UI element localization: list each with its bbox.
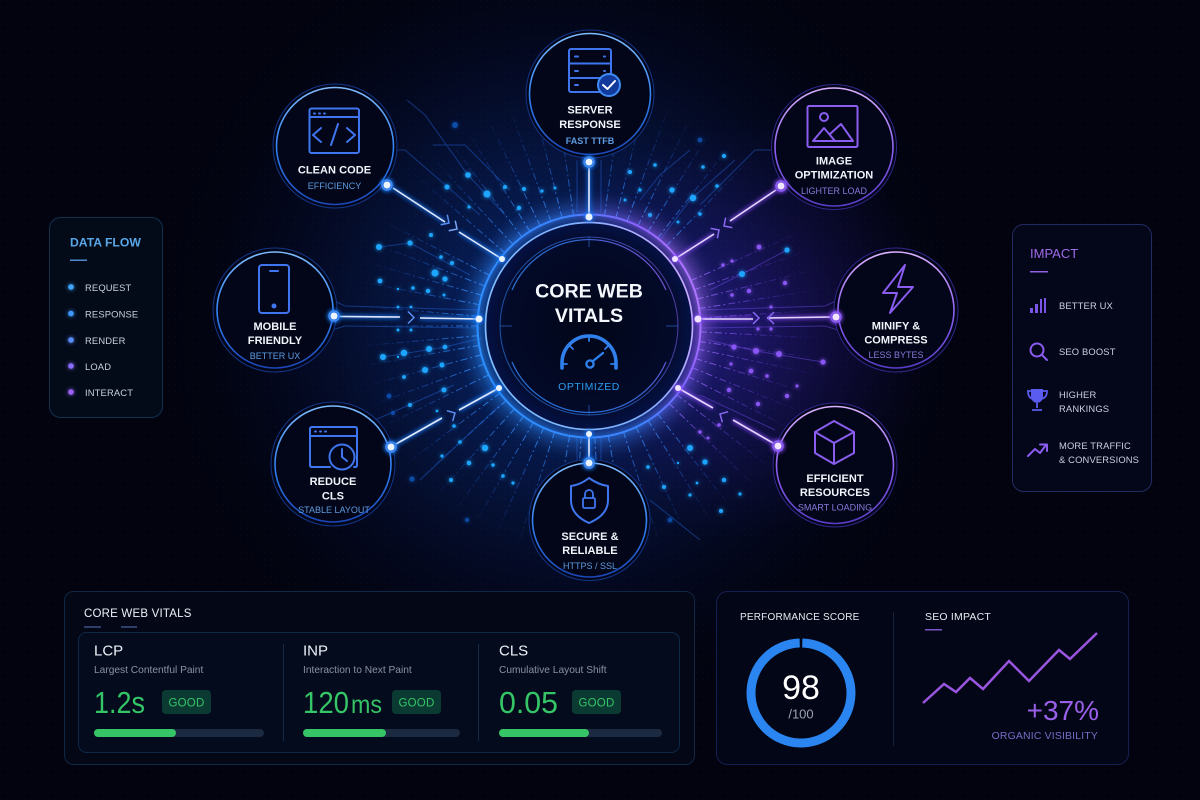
hub title: CORE WEB [535,280,643,302]
metric: inp: Interaction to Next Paint [303,665,412,676]
metric: lcp: LCP [94,642,123,660]
legend: load: LOAD [85,361,111,372]
central hub [478,214,700,438]
seo impact chart [923,611,1099,742]
data dots [343,113,826,522]
performance score gauge: PERFORMANCE SCORE [740,612,860,623]
legend: interact: INTERACT [85,387,133,398]
metric: cls: CLS [499,642,528,660]
connector: server response [588,168,590,217]
node: image optimization: LIGHTER LOAD [801,186,868,196]
metric: lcp: Largest Contentful Paint [94,665,203,676]
icon: picture [808,106,858,147]
metric: inp [303,642,460,737]
icon: smartphone [259,265,289,313]
panel: data flow [50,218,162,418]
panel: performance and seo [716,592,1128,764]
node: server response: FAST TTFB [566,136,615,146]
circuit traces [332,100,838,540]
performance score gauge: /100 [788,706,814,722]
hub status: OPTIMIZED [558,381,620,393]
item: better ux: BETTER UX [1059,300,1114,311]
icon: gauge [562,336,616,368]
item: seo boost [1030,344,1116,360]
connector: reduce cls [396,388,499,444]
node: secure and reliable [529,460,650,580]
item: better ux [1030,298,1114,313]
metric: inp: INP [303,642,328,660]
node: image optimization: IMAGE [816,156,852,168]
node: server response: RESPONSE [559,119,621,131]
metric: lcp: GOOD [169,698,204,710]
connection points: violet [672,181,841,451]
node: mobile friendly: MOBILE [253,321,297,333]
item: higher rankings [1028,389,1109,414]
seo impact chart: ORGANIC VISIBILITY [992,731,1098,742]
node: reduce cls: STABLE LAYOUT [298,505,370,515]
connector: efficient resources [678,388,773,443]
legend: response: RESPONSE [85,308,138,320]
node: minify and compress: LESS BYTES [868,350,924,360]
metric: inp: 120 [303,685,349,720]
node: server response: SERVER [567,104,613,116]
data flow heading: DATA FLOW [70,236,141,250]
hub title: VITALS [555,305,623,327]
node: mobile friendly [213,248,337,372]
node: clean code: EFFICIENCY [308,181,361,191]
icon: cube [815,421,854,464]
connector: clean code [393,188,502,259]
node: secure and reliable: SECURE & [561,531,619,543]
node: image optimization [772,84,896,210]
node: efficient resources: RESOURCES [800,487,870,499]
node: minify and compress [834,248,958,372]
connection points: blue [329,157,594,468]
node: efficient resources: SMART LOADING [798,502,872,512]
metrics heading: CORE WEB VITALS [84,608,192,620]
metric: lcp: 1.2s [94,685,145,720]
performance score gauge [740,612,860,744]
node: secure and reliable: RELIABLE [562,545,618,557]
metric: cls [499,642,662,737]
radial data rays [353,92,825,562]
panel: core web vitals metrics [64,592,694,764]
node: clean code [273,84,397,208]
connector: image optimization [678,190,776,257]
connector: mobile friendly [340,312,479,324]
seo impact chart: SEO IMPACT [925,611,991,623]
hub title [535,280,643,327]
metric: inp: ms [351,691,382,719]
item: more traffic: MORE TRAFFIC [1059,440,1131,451]
central ring glow [476,213,702,439]
icon: window with clock [310,427,357,470]
item: more traffic: & CONVERSIONS [1059,454,1139,465]
legend: request: REQUEST [85,282,131,293]
icon: shield with lock [571,478,608,523]
legend: render: RENDER [85,335,126,346]
impact heading: IMPACT [1030,246,1078,261]
node: mobile friendly: BETTER UX [250,351,300,361]
metric: cls: 0.05 [499,685,558,720]
node: reduce cls: CLS [322,490,344,502]
item: seo boost: SEO BOOST [1059,346,1116,357]
connector: minify and compress [702,312,830,324]
node: clean code: CLEAN CODE [298,164,371,176]
node: server response [526,30,654,158]
node: minify and compress: MINIFY & [872,320,920,332]
connector: secure and reliable [588,434,590,458]
item: more traffic [1028,440,1139,465]
node: image optimization: OPTIMIZATION [795,170,873,182]
metric: lcp [94,642,264,737]
item: higher rankings: RANKINGS [1059,403,1109,414]
item: higher rankings: HIGHER [1059,389,1096,400]
seo impact chart: +37% [1027,695,1099,726]
metric: cls: GOOD [579,698,614,710]
node: minify and compress: COMPRESS [864,334,928,346]
panel: impact [1012,224,1152,492]
node: mobile friendly: FRIENDLY [248,335,303,347]
icon: server with check [569,49,620,96]
node: reduce cls: REDUCE [310,476,356,488]
metric: cls: Cumulative Layout Shift [499,665,607,676]
node: efficient resources: EFFICIENT [806,473,864,485]
icon: lightning bolt [883,265,913,313]
node: reduce cls [271,402,395,526]
performance score gauge: 98 [782,669,820,707]
icon: code window [310,108,359,153]
legend: load [68,361,111,372]
metric: inp: GOOD [399,698,434,710]
node: secure and reliable: HTTPS / SSL [563,561,617,571]
node: efficient resources [773,403,897,527]
